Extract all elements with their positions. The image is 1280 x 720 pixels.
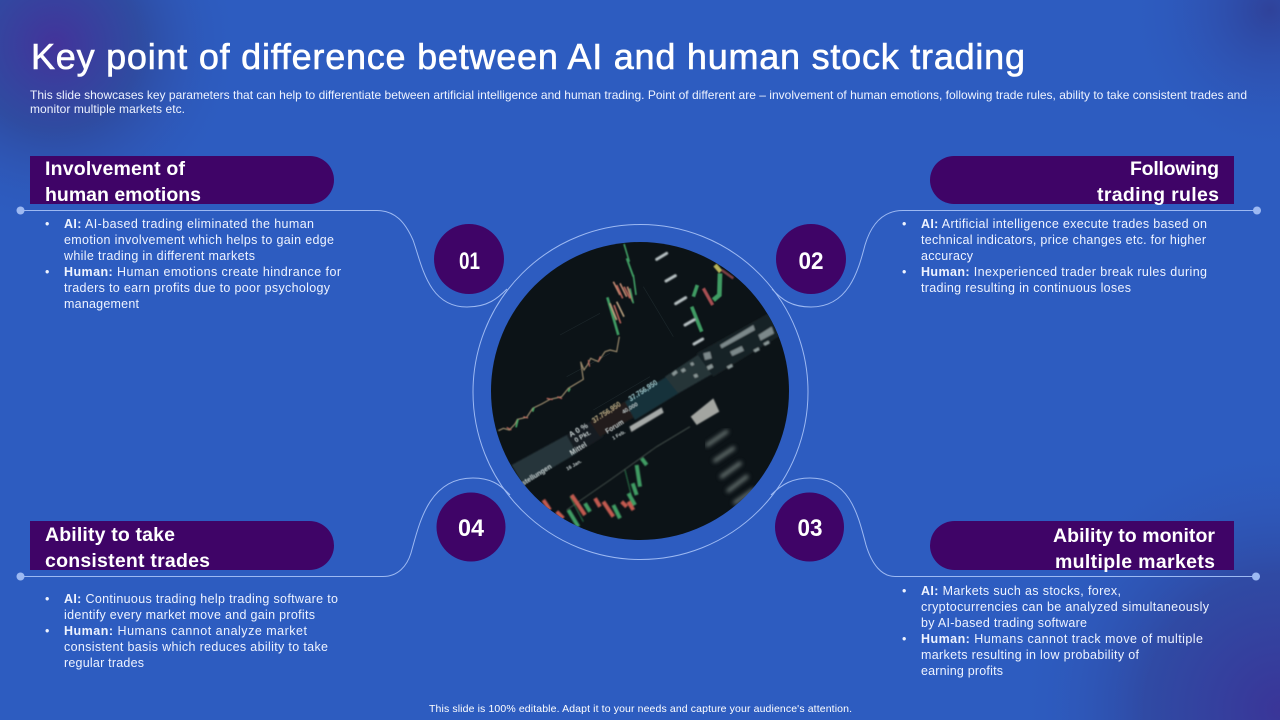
connector dot 1 bbox=[16, 206, 24, 214]
connector dot 2 bbox=[1253, 206, 1261, 214]
body text 1: management bbox=[64, 297, 140, 311]
body text 3: by AI-based trading software bbox=[921, 616, 1087, 630]
body text 4: • bbox=[45, 592, 49, 606]
body text 1: while trading in different markets bbox=[63, 249, 255, 263]
heading bar 1 bbox=[30, 156, 334, 204]
badge 04: 04 bbox=[458, 515, 485, 542]
body text 3: earning profits bbox=[921, 664, 1003, 678]
body text 2: AI: Artificial intelligence execute trades based on bbox=[921, 217, 1207, 231]
body text 4: consistent basis which reduces ability to take bbox=[64, 640, 328, 654]
body text 3: markets resulting in low probability of bbox=[921, 648, 1140, 662]
body text 1: • bbox=[45, 217, 49, 231]
band labels: 0 Pkt. bbox=[573, 429, 593, 444]
heading 3: multiple markets bbox=[1055, 551, 1215, 573]
body text 2: accuracy bbox=[921, 249, 974, 263]
blurred side menu bbox=[707, 432, 753, 503]
heading 3 bbox=[1053, 525, 1215, 573]
body text 1: AI: AI-based trading eliminated the human bbox=[64, 217, 314, 231]
heading bar 2 bbox=[930, 156, 1234, 204]
band labels: A 0 % bbox=[567, 421, 590, 439]
band labels: 1 Feb. bbox=[611, 429, 627, 442]
badge 04 bbox=[436, 492, 506, 562]
body text 3: cryptocurrencies can be analyzed simultaneously bbox=[921, 600, 1210, 614]
band labels: stellungen bbox=[520, 462, 553, 487]
heading 1: Involvement of bbox=[45, 158, 186, 180]
body text 3: • bbox=[902, 632, 906, 646]
band labels: 37.756,950 bbox=[627, 378, 659, 403]
title: Key point of difference between AI and human stock trading bbox=[31, 36, 1025, 77]
body text 2: technical indicators, price changes etc. for higher bbox=[921, 233, 1206, 247]
price axis labels bbox=[657, 253, 703, 344]
body text 2 bbox=[902, 217, 1207, 295]
panel: involvement of human emotions bbox=[16, 156, 341, 311]
band labels bbox=[520, 378, 659, 487]
heading 2: Following bbox=[1130, 158, 1219, 180]
subtitle text block: This slide showcases key parameters that can help to differentiate between artificial intelligence and human trading. Point of different are – involvement of human emotions, following trade rules, ability to take consistent trades and bbox=[30, 88, 1247, 102]
body text 2: Human: Inexperienced trader break rules during bbox=[921, 265, 1207, 279]
body text 3: AI: Markets such as stocks, forex, bbox=[921, 584, 1121, 598]
heading 2: trading rules bbox=[1097, 184, 1219, 206]
central chart photo bbox=[490, 240, 800, 542]
badge 02: 02 bbox=[798, 248, 824, 275]
body text 4: • bbox=[45, 624, 49, 638]
heading 2 bbox=[1097, 158, 1219, 206]
band labels: Forum bbox=[604, 417, 625, 436]
badge 02 bbox=[776, 224, 846, 294]
band labels: Mittel bbox=[568, 440, 589, 457]
lower candles bbox=[543, 427, 690, 527]
connector dot 3 bbox=[1252, 572, 1260, 580]
heading 1: human emotions bbox=[45, 184, 201, 206]
body text 4 bbox=[45, 592, 338, 670]
heading bar 3 bbox=[930, 521, 1234, 570]
data band bbox=[512, 314, 779, 484]
panel: following trading rules bbox=[902, 156, 1261, 295]
badge 03: 03 bbox=[798, 515, 822, 542]
panel: ability to monitor multiple markets bbox=[902, 521, 1260, 678]
connector dot 4 bbox=[16, 572, 24, 580]
badge 01: 01 bbox=[459, 248, 480, 275]
band labels: 16 Jan. bbox=[565, 458, 584, 472]
heading 4 bbox=[45, 524, 210, 572]
body text 4: AI: Continuous trading help trading software to bbox=[64, 592, 338, 606]
body text 1: • bbox=[45, 265, 49, 279]
body text 1: emotion involvement which helps to gain edge bbox=[64, 233, 334, 247]
heading 3: Ability to monitor bbox=[1053, 525, 1215, 547]
body text 2: trading resulting in continuous loses bbox=[921, 281, 1131, 295]
body text 3: • bbox=[902, 584, 906, 598]
badge 01 bbox=[434, 224, 504, 294]
band labels: 37.756,950 bbox=[590, 400, 622, 425]
subtitle text block: monitor multiple markets etc. bbox=[30, 102, 185, 116]
badge 03 bbox=[775, 492, 844, 562]
heading 1 bbox=[45, 158, 201, 206]
body text 1: traders to earn profits due to poor psychology bbox=[64, 281, 331, 295]
body text 3 bbox=[902, 584, 1210, 678]
body text 2: • bbox=[902, 217, 906, 231]
subtitle text block bbox=[30, 88, 1247, 116]
body text 1 bbox=[45, 217, 341, 311]
body text 4: Human: Humans cannot analyze market bbox=[64, 624, 308, 638]
heading 4: Ability to take bbox=[45, 524, 175, 546]
upper line chart bbox=[498, 244, 733, 431]
footer note: This slide is 100% editable. Adapt it to your needs and capture your audience's attention. bbox=[429, 703, 852, 715]
body text 3: Human: Humans cannot track move of multiple bbox=[921, 632, 1203, 646]
heading bar 4 bbox=[30, 521, 334, 570]
body text 1: Human: Human emotions create hindrance for bbox=[64, 265, 341, 279]
heading 4: consistent trades bbox=[45, 550, 210, 572]
connector lines and outer ring bbox=[20, 210, 1257, 576]
chart grid bbox=[560, 287, 673, 410]
body text 2: • bbox=[902, 265, 906, 279]
panel: ability to take consistent trades bbox=[16, 521, 338, 670]
body text 4: identify every market move and gain profits bbox=[64, 608, 315, 622]
body text 4: regular trades bbox=[64, 656, 144, 670]
band labels: 40,000 bbox=[621, 402, 639, 416]
